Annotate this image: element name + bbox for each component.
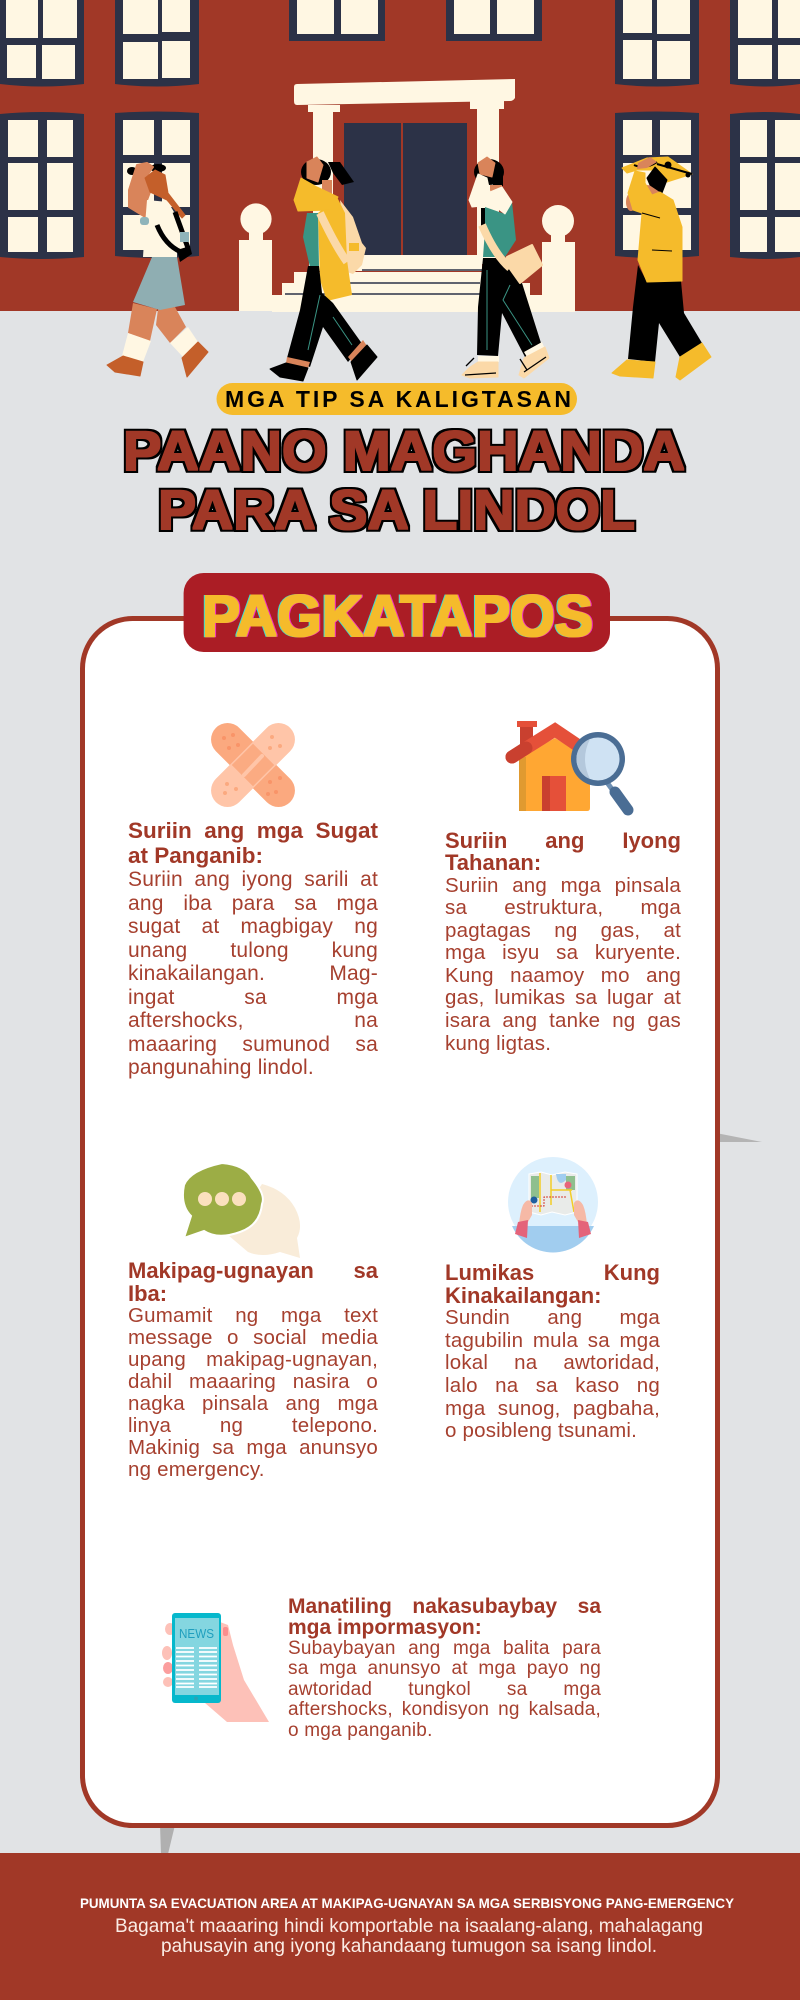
text block: Suriin ang mga Sugat at Panganib <box>128 818 378 1079</box>
entrance portico and door <box>294 79 515 264</box>
text block: Suriin ang mga Sugat at Panganib: kinakailangan. Mag- <box>128 962 378 985</box>
text block: Lumikas Kung Kinakailangan: mga sunog, pagbaha, <box>445 1397 660 1420</box>
text block: Makipag-ugnayan sa Iba: Gumamit ng mga text <box>128 1304 378 1327</box>
title <box>123 419 685 541</box>
icon: map in hands <box>508 1157 598 1252</box>
text block: Makipag-ugnayan sa Iba: dahil maaaring nasira o <box>128 1370 378 1393</box>
text block: Suriin ang mga Sugat at Panganib: ingat sa mga <box>128 986 378 1008</box>
text block: Lumikas Kung Kinakailangan: Kinakailangan: <box>445 1283 601 1308</box>
person: girl in skirt <box>107 163 208 377</box>
text block: Suriin ang iyong Tahanan: Tahanan: <box>445 850 541 875</box>
text block: Manatiling nakasubaybay <box>288 1595 602 1741</box>
footer band: PUMUNTA SA EVACUATION AREA AT MAKIPAG-UGNAYAN SA MGA SERBISYONG PANG-EMERGENCY <box>80 1895 735 1911</box>
person: man in teal vest <box>462 157 549 378</box>
windows <box>0 0 800 259</box>
text block: Manatiling nakasubaybay: Subaybayan ang mga balita para <box>288 1638 601 1658</box>
text block: Suriin ang mga Sugat at Panganib: maaaring sumunod sa <box>128 1032 378 1056</box>
grey spike below card <box>160 1825 175 1854</box>
ground <box>0 311 800 401</box>
text block: Suriin ang mga Sugat at Panganib: at Panganib: <box>128 843 263 868</box>
text block: Suriin ang iyong Tahanan: kung ligtas. <box>445 1032 551 1055</box>
person: woman in yellow cardigan <box>270 157 377 381</box>
text block: Lumikas Kung Kinakailangan: Lumikas Kung <box>445 1260 660 1285</box>
footer band: Bagama't maaaring hindi komportable na isaalang-alang, mahalagang <box>115 1915 703 1937</box>
text block: Suriin ang iyong Tahanan: gas, lumikas sa lugar at <box>445 986 681 1009</box>
grey spike at right of card <box>716 1133 762 1142</box>
text block: Suriin ang iyong Tahanan: mga isyu sa kuryente. <box>445 941 681 964</box>
title: PARA SA LINDOL <box>158 478 635 541</box>
text block: Makipag-ugnayan sa Iba: Makinig sa mga anunsyo <box>128 1436 378 1459</box>
text block: Suriin ang mga Sugat at Panganib: Suriin ang mga Sugat <box>128 818 378 843</box>
text block: Lumikas Kung Kinakailangan: o posibleng tsunami. <box>445 1419 637 1442</box>
text block: Suriin ang iyong Tahanan: Suriin ang mga pinsala <box>445 874 681 896</box>
text block: Makipag-ugnayan sa Iba: nagka pinsala ang mga <box>128 1392 378 1415</box>
text block: Manatiling nakasubaybay: mga impormasyon: <box>288 1616 482 1639</box>
text block: Manatiling nakasubaybay: awtoridad tungkol sa mga <box>288 1679 601 1700</box>
tagline pill: MGA TIP SA KALIGTASAN <box>225 386 571 412</box>
text block: Suriin ang iyong Tahanan: Kung naamoy mo ang <box>445 964 681 987</box>
text block: Manatiling nakasubaybay: o mga panganib. <box>288 1720 433 1741</box>
icon: bandage <box>204 716 302 814</box>
icon: phone with news in hand: NEWS <box>179 1627 214 1641</box>
building wall <box>0 0 800 312</box>
text block: Suriin ang iyong Tahanan: pagtagas ng gas, at <box>445 919 681 942</box>
text block: Suriin ang mga Sugat at Panganib: ang iba para sa mga <box>128 892 378 914</box>
text block: Lumikas Kung Kinakailangan: Sundin ang mga <box>445 1306 660 1329</box>
steps and pedestals <box>239 203 575 312</box>
icon: phone with news in hand <box>162 1613 269 1722</box>
text block: Manatiling nakasubaybay: sa mga anunsyo at mga payo ng <box>288 1658 601 1679</box>
text block: Suriin ang iyong Tahanan <box>445 828 681 1055</box>
icon: house and magnifier <box>512 721 628 811</box>
text block: Suriin ang iyong Tahanan: Suriin ang Iyong <box>445 828 681 852</box>
footer band <box>0 1853 800 2000</box>
text block: Lumikas Kung Kinakailangan: tagubilin mula sa mga <box>445 1329 660 1352</box>
text block: Suriin ang iyong Tahanan: isara ang tanke ng gas <box>445 1009 681 1032</box>
text block: Lumikas Kung Kinakailangan <box>445 1260 660 1442</box>
text block: Manatiling nakasubaybay: aftershocks, kondisyon ng kalsada, <box>288 1699 601 1720</box>
text block: Makipag-ugnayan sa Iba: Iba: <box>128 1281 167 1306</box>
text block: Makipag-ugnayan sa Iba <box>128 1258 378 1481</box>
section banner: PAGKATAPOS <box>202 584 593 649</box>
text block: Suriin ang mga Sugat at Panganib: sugat at magbigay ng <box>128 915 378 938</box>
text block: Lumikas Kung Kinakailangan: lokal na awtoridad, <box>445 1351 660 1374</box>
text block: Suriin ang mga Sugat at Panganib: Suriin ang iyong sarili at <box>128 868 378 891</box>
icon: chat bubbles <box>183 1163 300 1258</box>
text block: Lumikas Kung Kinakailangan: lalo na sa kaso ng <box>445 1374 660 1397</box>
text block: Makipag-ugnayan sa Iba: Makipag-ugnayan sa <box>128 1258 378 1283</box>
title: PAANO MAGHANDA <box>123 419 685 482</box>
text block: Makipag-ugnayan sa Iba: upang makipag-ugnayan, <box>128 1348 378 1371</box>
text block: Suriin ang mga Sugat at Panganib: unang tulong kung <box>128 938 378 962</box>
text block: Manatiling nakasubaybay: Manatiling nakasubaybay sa <box>288 1595 601 1618</box>
text block: Suriin ang iyong Tahanan: sa estruktura, mga <box>445 896 681 919</box>
text block: Suriin ang mga Sugat at Panganib: pangunahing lindol. <box>128 1056 314 1079</box>
panel: content card <box>82 618 718 1826</box>
text block: Suriin ang mga Sugat at Panganib: aftershocks, na <box>128 1009 378 1032</box>
person: man in yellow shirt with hat <box>612 157 711 380</box>
text block: Makipag-ugnayan sa Iba: message o social media <box>128 1326 378 1349</box>
footer band: pahusayin ang iyong kahandaang tumugon sa isang lindol. <box>161 1935 657 1957</box>
text block: Makipag-ugnayan sa Iba: linya ng telepono. <box>128 1414 378 1437</box>
text block: Makipag-ugnayan sa Iba: ng emergency. <box>128 1458 265 1481</box>
